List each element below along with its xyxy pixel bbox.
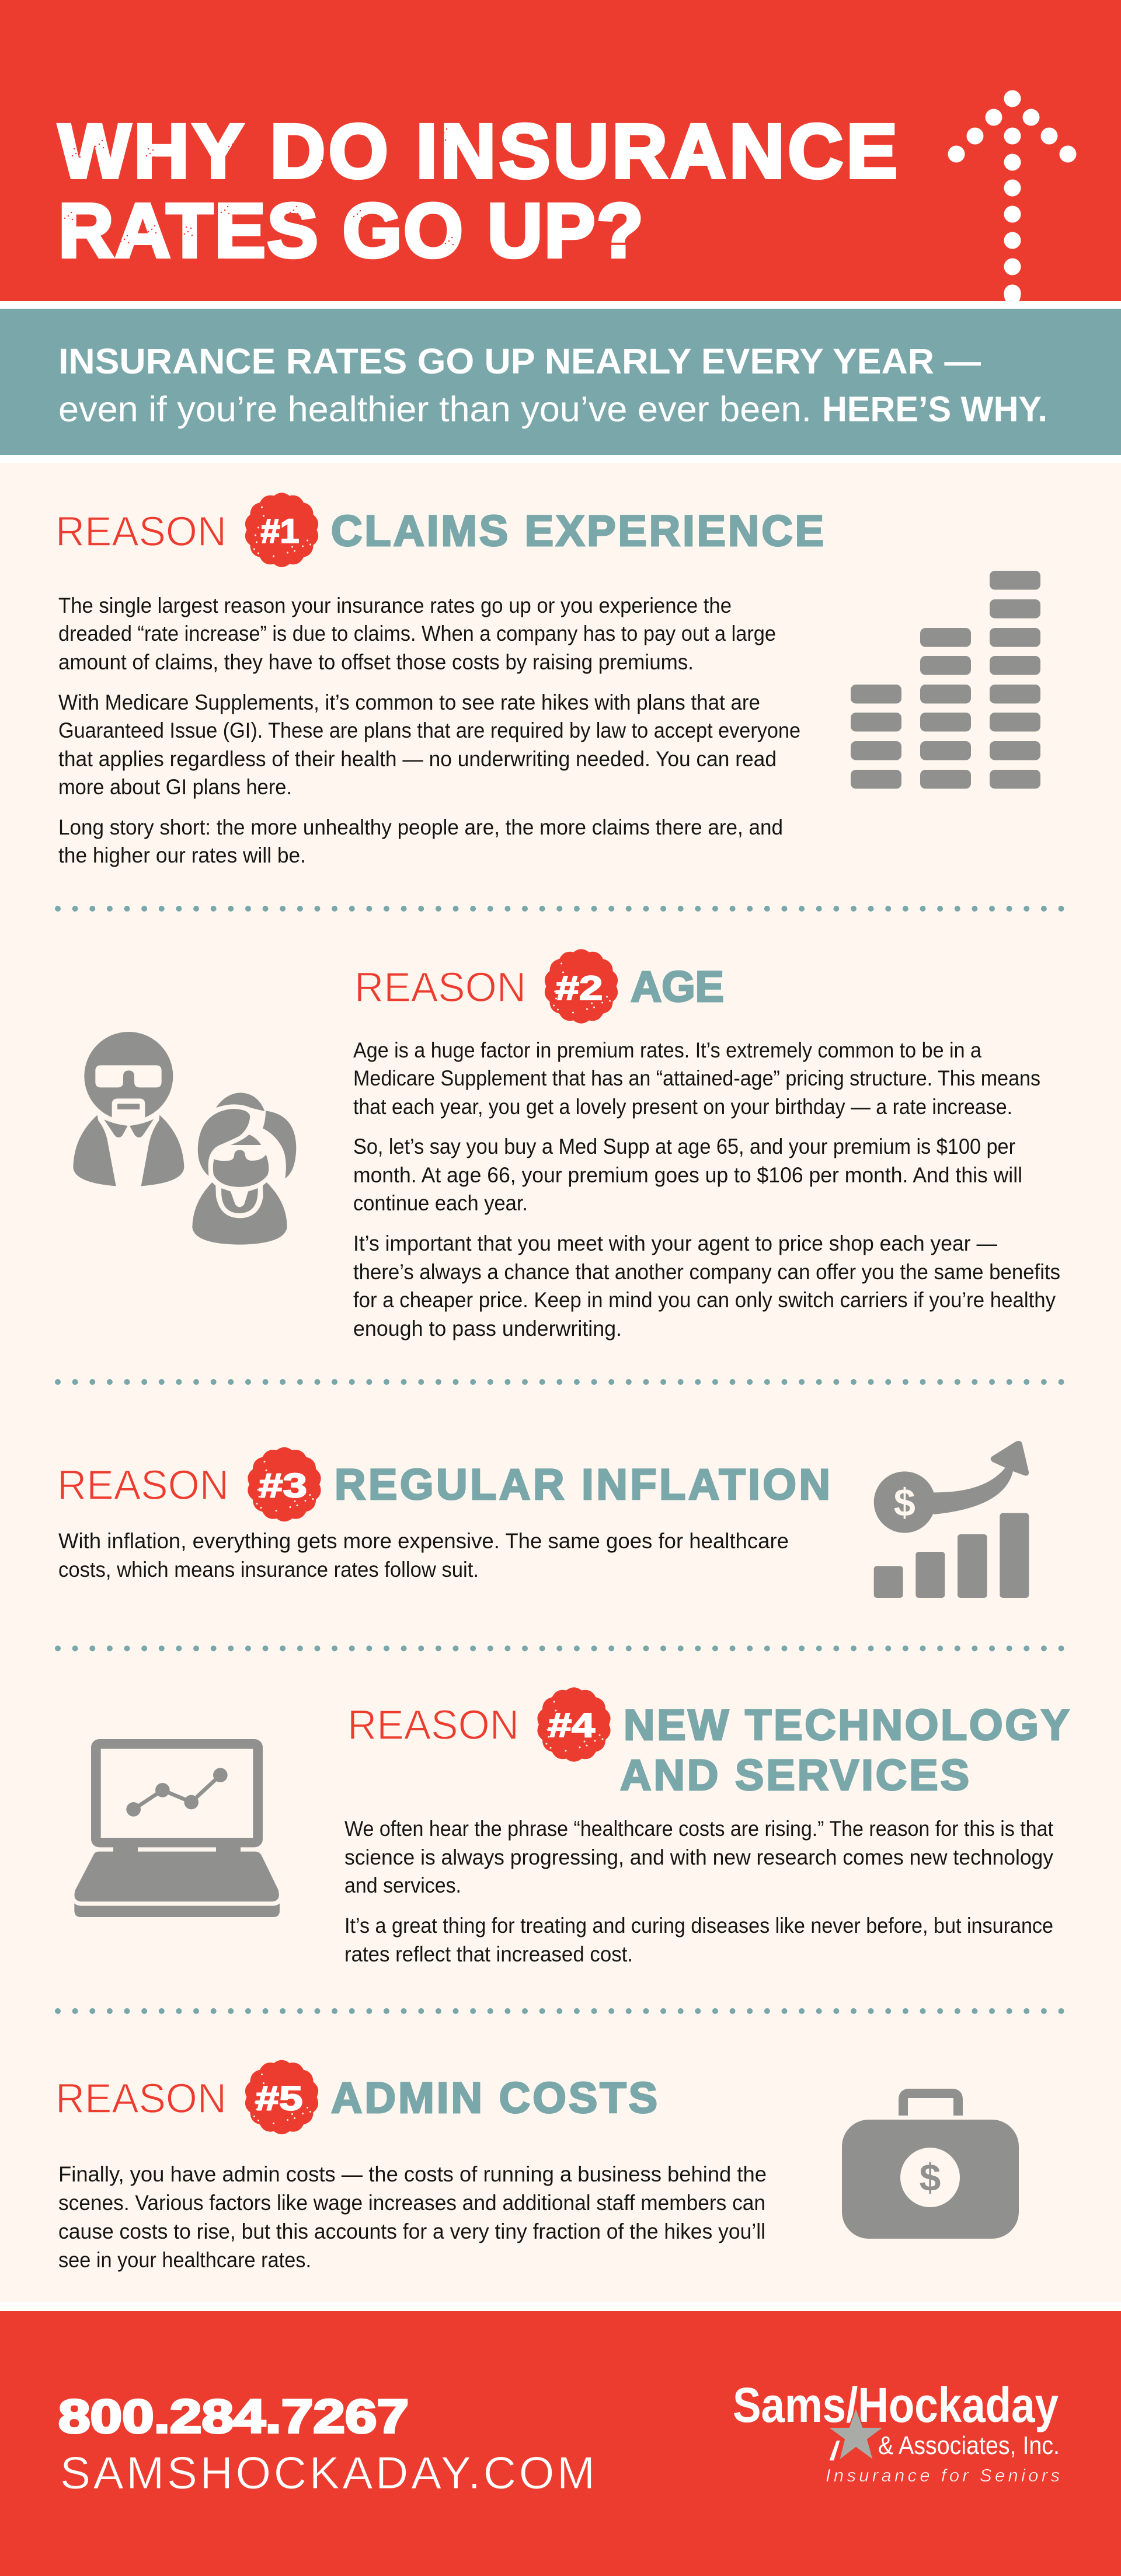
text block: reason 2: for a cheaper price. Keep in mind you can only switch carriers if you’re healthy xyxy=(353,1288,1056,1312)
text block: reason 2 xyxy=(353,1038,1060,1341)
icon: money briefcase xyxy=(842,2093,1019,2239)
text block: reason 5 xyxy=(58,2162,767,2272)
panel: footer xyxy=(0,2311,1121,2576)
subtitle text: even if you’re healthier than you’ve ever been. xyxy=(58,389,812,429)
text block: reason 2: Medicare Supplement that has an “attained-age” pricing structure. This means xyxy=(353,1066,1040,1090)
badge #5 xyxy=(245,2060,318,2134)
header band xyxy=(0,0,1121,301)
logo: Sams/Hockaday: Sams/Hockaday xyxy=(733,2378,1059,2432)
text block: reason 4: and services. xyxy=(344,1873,461,1897)
badge #1: #1 xyxy=(260,512,299,550)
heading: reason 4: NEW TECHNOLOGY xyxy=(624,1701,1070,1749)
text block: reason 2: enough to pass underwriting. xyxy=(353,1317,622,1341)
icon: rising dollar and bars xyxy=(874,1441,1029,1598)
badge #1 xyxy=(245,493,318,567)
website: SAMSHOCKADAY.COM xyxy=(60,2447,595,2498)
panel: header xyxy=(0,0,1121,301)
text block: reason 4: science is always progressing, and with new research comes new technology xyxy=(344,1845,1053,1869)
title: WHY DO INSURANCE xyxy=(58,108,897,194)
badge #5: #5 xyxy=(256,2080,302,2117)
panel: reason 2 xyxy=(73,949,1060,1341)
logo: Sams/Hockaday xyxy=(733,2378,1060,2486)
subtitle text: INSURANCE RATES GO UP NEARLY EVERY YEAR — xyxy=(58,341,981,381)
subtitle text xyxy=(58,341,1047,429)
title: RATES GO UP? xyxy=(58,187,643,273)
text block: reason 1: more about GI plans here. xyxy=(58,775,292,799)
logo: Sams/Hockaday: Insurance for Seniors xyxy=(826,2465,1060,2486)
text block: reason 2: It’s important that you meet with your agent to price shop each year — xyxy=(353,1231,997,1255)
panel: reason 3 xyxy=(57,1441,1029,1598)
heading: reason 1: CLAIMS EXPERIENCE xyxy=(331,507,824,555)
heading: reason 2: REASON xyxy=(354,965,526,1011)
icon: dotted up arrow xyxy=(948,90,1077,301)
heading: reason 4: AND SERVICES xyxy=(620,1751,969,1799)
text block: reason 3: costs, which means insurance rates follow suit. xyxy=(58,1558,479,1582)
woman xyxy=(192,1092,296,1245)
text block: reason 1: Guaranteed Issue (GI). These are plans that are required by law to accept everyone xyxy=(58,718,800,742)
badge #2: #2 xyxy=(556,969,603,1007)
text block: reason 1: that applies regardless of their health — no underwriting needed. You can read xyxy=(58,747,777,771)
icon: laptop with line chart xyxy=(74,1739,280,1917)
heading: reason 1: REASON xyxy=(55,509,227,555)
badge #3: #3 xyxy=(259,1467,307,1505)
heading: reason 4 xyxy=(347,1687,1070,1799)
footer band xyxy=(0,2311,1121,2576)
heading: reason 2: AGE xyxy=(631,962,724,1011)
text block: reason 5: see in your healthcare rates. xyxy=(58,2248,311,2272)
text block: reason 5: scenes. Various factors like wage increases and additional staff members can xyxy=(58,2191,765,2215)
badge #4: #4 xyxy=(548,1706,595,1744)
text block: reason 2: continue each year. xyxy=(353,1191,528,1215)
subtitle background xyxy=(0,309,1121,455)
badge #4 xyxy=(537,1687,611,1762)
icon: money briefcase: $ xyxy=(920,2156,941,2199)
panel: reason 4 xyxy=(74,1687,1070,1966)
text block: reason 1: Long story short: the more unhealthy people are, the more claims there are, and xyxy=(58,815,783,839)
text block: reason 2: there’s always a chance that another company can offer you the same benefits xyxy=(353,1260,1060,1284)
text block: reason 1: dreaded “rate increase” is due to claims. When a company has to pay out a large xyxy=(58,622,776,645)
text block: reason 2: So, let’s say you buy a Med Supp at age 65, and your premium is $100 per xyxy=(353,1135,1015,1158)
icon: stacked bar chart xyxy=(851,571,1040,789)
heading: reason 5: REASON xyxy=(55,2076,227,2122)
text block: reason 4: It’s a great thing for treating and curing diseases like never before, but insurance xyxy=(344,1914,1053,1938)
text block: reason 1: amount of claims, they have to offset those costs by raising premiums. xyxy=(58,650,694,674)
heading: reason 5 xyxy=(55,2060,657,2134)
logo: Sams/Hockaday: & Associates, Inc. xyxy=(878,2431,1060,2460)
text block: reason 5: cause costs to rise, but this accounts for a very tiny fraction of the hikes you’ll xyxy=(58,2219,765,2243)
badge #2 xyxy=(545,949,618,1024)
text block: reason 4: rates reflect that increased cost. xyxy=(344,1942,633,1966)
text block: reason 2: Age is a huge factor in premium rates. It’s extremely common to be in a xyxy=(353,1038,981,1062)
heading: reason 1 xyxy=(55,493,824,567)
panel: reason 5 xyxy=(55,2060,1019,2272)
text block: reason 1: the higher our rates will be. xyxy=(58,843,306,867)
heading: reason 4: REASON xyxy=(347,1702,519,1748)
icon: rising dollar and bars: $ xyxy=(894,1481,915,1524)
text block: reason 2: month. At age 66, your premium goes up to $106 per month. And this will xyxy=(353,1163,1022,1187)
icon: star xyxy=(828,2407,884,2460)
subtitle text: HERE’S WHY. xyxy=(822,389,1047,429)
panel: subtitle band xyxy=(0,309,1121,455)
text block: reason 5: Finally, you have admin costs — the costs of running a business behind the xyxy=(58,2162,767,2186)
text block: reason 4 xyxy=(344,1817,1054,1966)
title xyxy=(58,108,897,273)
heading: reason 2 xyxy=(354,949,724,1024)
heading: reason 3 xyxy=(57,1447,830,1521)
text block: reason 2: that each year, you get a lovely present on your birthday — a rate increase. xyxy=(353,1095,1012,1119)
content background xyxy=(0,463,1121,2302)
icon: senior couple xyxy=(73,1032,296,1245)
text block: reason 4: We often hear the phrase “healthcare costs are rising.” The reason for this is that xyxy=(344,1817,1054,1841)
text block: reason 1 xyxy=(58,594,800,867)
phone number: 800.284.7267 xyxy=(58,2390,409,2443)
heading: reason 5: ADMIN COSTS xyxy=(331,2074,657,2122)
text block: reason 3: With inflation, everything gets more expensive. The same goes for healthcare xyxy=(58,1529,789,1553)
panel: reason 1 xyxy=(55,493,1040,867)
text block: reason 3 xyxy=(58,1529,789,1582)
man xyxy=(73,1032,184,1186)
heading: reason 3: REGULAR INFLATION xyxy=(335,1460,830,1509)
heading: reason 3: REASON xyxy=(57,1462,229,1509)
text block: reason 1: With Medicare Supplements, it’s common to see rate hikes with plans that are xyxy=(58,690,760,714)
text block: reason 1: The single largest reason your insurance rates go up or you experience the xyxy=(58,594,732,617)
badge #3 xyxy=(248,1447,321,1521)
